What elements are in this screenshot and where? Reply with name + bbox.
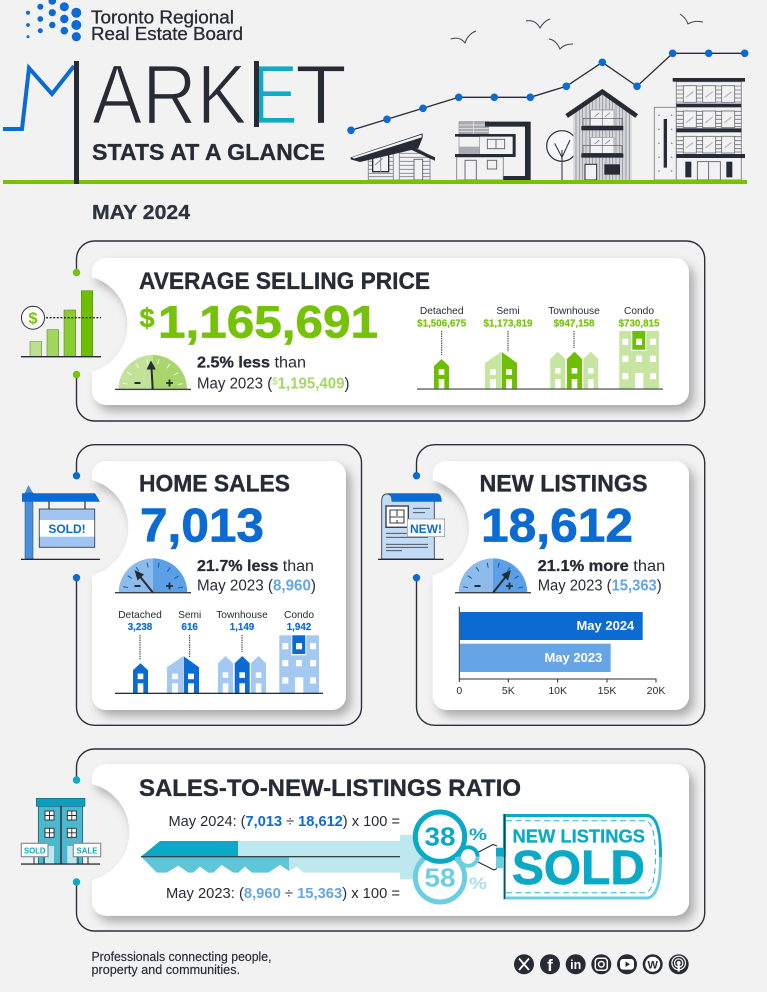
values: 1,942 <box>287 622 312 633</box>
icon: bar chart with dollar: $ <box>29 310 38 328</box>
breakdown by home type <box>115 610 323 694</box>
footer tagline: property and communities. <box>92 963 240 977</box>
vertical bar M <box>74 61 79 184</box>
panel: sales-to-new-listings ratio <box>21 749 705 931</box>
heading: NEW LISTINGS <box>480 471 648 498</box>
icon: new listing document <box>378 493 445 560</box>
heading: AVERAGE SELLING PRICE <box>139 268 430 295</box>
tag: new listings sold <box>504 814 661 899</box>
values <box>417 318 660 329</box>
letter E: E <box>252 47 298 141</box>
values: $730,815 <box>619 318 660 329</box>
labels: Semi <box>178 610 201 621</box>
comparison text <box>538 558 665 595</box>
letter T: T <box>295 47 347 141</box>
birds <box>451 14 703 49</box>
icon: youtube <box>620 959 634 970</box>
footer tagline: Professionals connecting people, <box>92 950 272 964</box>
axis labels: 0 <box>456 685 462 697</box>
big number: 1,165,691 <box>158 297 378 348</box>
card <box>433 461 689 710</box>
comparison text: 21.1% more than <box>538 558 665 575</box>
title: MARKET wordmark <box>3 47 347 184</box>
key bar chart <box>141 835 430 879</box>
house 2 <box>455 122 531 180</box>
gauge <box>455 558 531 593</box>
icon: x <box>519 958 529 970</box>
labels: Semi <box>496 306 520 317</box>
labels: Condo <box>624 306 654 317</box>
bar 2024 <box>460 612 643 640</box>
icon: instagram <box>595 958 607 970</box>
icon: wordpress: W <box>648 960 659 972</box>
value 58: 58 <box>424 863 456 893</box>
panel: new listings <box>378 445 705 725</box>
icon: facebook: f <box>547 956 553 975</box>
panel: home sales <box>21 445 362 725</box>
logo text <box>91 6 243 44</box>
bar labels <box>544 618 635 665</box>
vertical bar E <box>254 61 259 127</box>
formula 2024: May 2024: (7,013 ÷ 18,612) x 100 = <box>168 814 400 830</box>
value 38: 38 <box>424 822 456 852</box>
formula 2023: May 2023: (8,960 ÷ 15,363) x 100 = <box>166 886 400 902</box>
icon: logo dots <box>26 0 81 41</box>
panel frame <box>416 445 705 725</box>
subtitle: STATS AT A GLANCE <box>92 139 325 165</box>
icon: blue chart line M <box>3 66 74 129</box>
icon: linkedin: in <box>570 958 581 972</box>
comparison text <box>197 558 316 595</box>
labels: Condo <box>284 610 314 621</box>
labels <box>420 306 654 317</box>
letters ARK: ARK <box>92 47 247 141</box>
repeated vertical bar over ground line <box>74 178 79 184</box>
values: $1,506,675 <box>417 318 467 329</box>
house icons <box>133 635 319 693</box>
ring 38 percent <box>415 812 478 902</box>
icon: wordpress <box>645 957 660 972</box>
illustration: houses skyline <box>351 78 745 180</box>
values: $947,158 <box>554 318 595 329</box>
date: MAY 2024 <box>92 202 191 224</box>
connector dots <box>73 269 80 378</box>
logo: Toronto Regional Real Estate Board <box>26 0 243 44</box>
house 3 <box>567 92 637 180</box>
panel frame <box>76 445 362 725</box>
axis labels: 10K <box>548 685 567 697</box>
heading: HOME SALES <box>139 471 290 498</box>
gauge <box>115 558 191 593</box>
card <box>92 461 346 710</box>
icon: apartment with sold and sale signs: SALE <box>76 846 98 856</box>
icon: sold sign: SOLD! <box>48 522 86 536</box>
tag: new listings sold: NEW LISTINGS <box>512 826 645 847</box>
values: 3,238 <box>128 622 153 633</box>
heading: SALES-TO-NEW-LISTINGS RATIO <box>139 775 521 802</box>
comparison text: May 2023 ($1,195,409) <box>197 375 350 392</box>
breakdown by home type <box>417 306 663 390</box>
logo text: Real Estate Board <box>91 23 243 44</box>
values: 1,149 <box>230 622 255 633</box>
gauge <box>115 355 191 390</box>
comparison text <box>197 355 350 392</box>
house icons <box>434 331 659 389</box>
icon: podcast <box>672 956 686 972</box>
axes <box>459 607 656 682</box>
connector dots <box>73 472 80 581</box>
footer tagline <box>92 950 272 977</box>
axis labels <box>456 685 665 697</box>
apartment building <box>654 78 745 180</box>
labels: Townhouse <box>548 306 600 317</box>
axis labels: 15K <box>598 685 616 697</box>
tag: new listings sold: SOLD <box>512 842 645 895</box>
labels <box>118 610 314 621</box>
icon: apartment with sold and sale signs <box>21 798 101 865</box>
big number: $ <box>140 303 155 333</box>
comparison text: 21.7% less than <box>197 558 314 575</box>
comparison text: May 2023 (15,363) <box>538 578 662 595</box>
labels: Detached <box>118 610 162 621</box>
labels: Townhouse <box>216 610 268 621</box>
icon: sold sign <box>21 485 100 560</box>
connector dots <box>413 472 420 581</box>
values <box>128 622 312 633</box>
icon: apartment with sold and sale signs: SOLD <box>24 846 46 856</box>
panel frame <box>76 241 705 421</box>
icon: new listing document: NEW! <box>410 522 442 536</box>
percent 58: % <box>469 874 487 893</box>
panel frame <box>76 749 705 931</box>
labels: Detached <box>420 306 464 317</box>
logo text: Toronto Regional <box>91 6 234 27</box>
card <box>92 764 689 916</box>
tag connector <box>473 844 504 870</box>
comparison text: 2.5% less than <box>197 355 306 372</box>
axis labels: 20K <box>647 685 665 697</box>
comparison text: May 2023 (8,960) <box>197 578 316 595</box>
tree <box>547 131 577 180</box>
bar labels: May 2024 <box>576 618 635 633</box>
big number: 7,013 <box>140 499 264 552</box>
house 1 <box>351 133 435 180</box>
big number: 18,612 <box>481 499 633 552</box>
bar 2023 <box>460 644 611 672</box>
social icons <box>514 954 689 975</box>
values: $1,173,819 <box>483 318 533 329</box>
connector dots <box>73 776 80 886</box>
axis labels: 5K <box>502 685 515 697</box>
values: 616 <box>182 622 198 633</box>
panel: average selling price <box>21 241 705 421</box>
green ground line <box>3 180 747 184</box>
card <box>92 258 689 405</box>
bar labels: May 2023 <box>544 650 602 665</box>
icon: bar chart with dollar <box>21 291 101 357</box>
bar chart <box>456 607 665 697</box>
percent 38: % <box>469 825 487 844</box>
line chart with dots <box>347 50 748 134</box>
